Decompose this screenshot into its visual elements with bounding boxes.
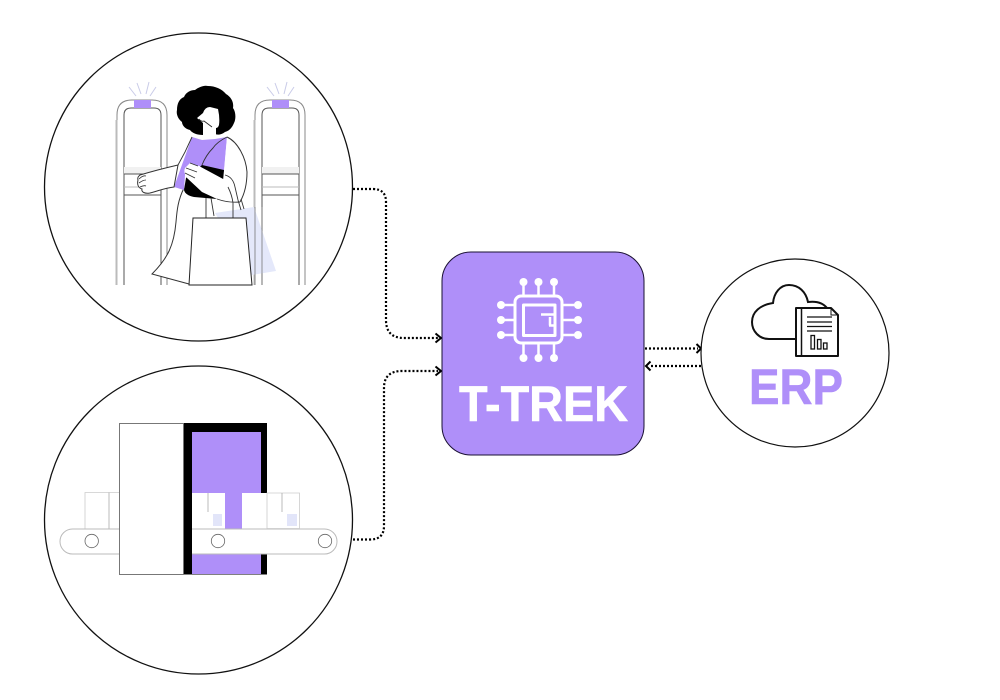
woman right upper arm [224,137,247,202]
woman face and neck [197,107,219,140]
woman upper back line [178,137,192,165]
left hand fingers [139,176,146,187]
woman dress [152,188,250,284]
shopping bag [189,218,252,285]
box left [85,492,120,529]
box inside tunnel [192,493,225,528]
arrow: gate to T-TREK [353,189,441,342]
label: T-TREK: T-TREK [459,376,628,432]
conveyor belt [60,529,337,554]
woman left arm on gate [138,165,178,193]
icon: left security gate [116,82,167,285]
tunnel purple interior [192,432,261,574]
shopping bag shadow [215,207,276,275]
illustration: woman with shopping bag [138,86,276,285]
icon: cloud [752,285,827,339]
icon: right security gate [254,82,305,285]
woman hair [177,86,235,135]
panel: T-TREK processor [442,252,644,455]
woman sleeveless top [174,137,227,190]
tunnel frame [183,423,267,574]
woman forearm and hand [184,163,240,203]
gate lines through shadow [255,207,262,285]
icon: document with chart [796,308,838,356]
tunnel white cover [120,424,184,574]
arrow: ERP to T-TREK [646,362,701,370]
box leaving tunnel [242,493,300,528]
woman jaw line [199,119,212,127]
black tablet [184,165,224,199]
panel: customer at security gates [44,33,352,341]
arrow: T-TREK to ERP [645,344,701,353]
bag handles [206,175,244,218]
woman dress outline [152,188,189,284]
panel: ERP [701,259,889,447]
label: ERP: ERP [749,359,843,415]
tunnel side black strip [183,423,192,574]
panel: conveyor scanning tunnel [44,366,352,674]
forearm details [185,137,240,202]
icon: chip [497,278,582,362]
arrow: conveyor to T-TREK [353,366,441,540]
